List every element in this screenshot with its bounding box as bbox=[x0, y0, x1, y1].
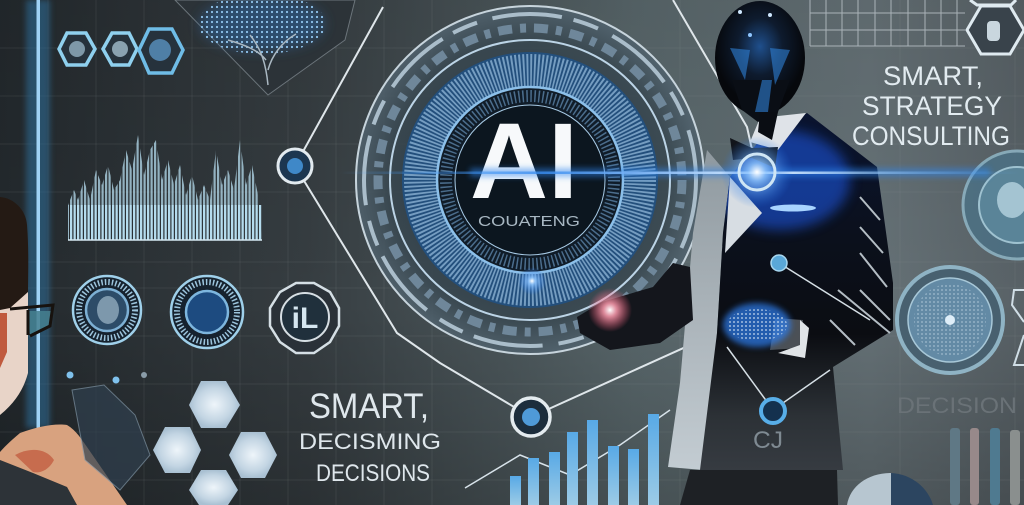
dial subtitle: COUATENG bbox=[478, 213, 580, 230]
sleeve stripes bbox=[830, 197, 890, 345]
dark suit body bbox=[700, 113, 893, 470]
hexagon icon top right bbox=[967, 0, 1024, 54]
network connection lines bbox=[295, 0, 757, 417]
smart decisions text: DECISIONS bbox=[316, 460, 430, 487]
faded decision label: DECISION bbox=[897, 393, 1017, 418]
consultant figure bbox=[577, 1, 893, 505]
brain tree hologram top bbox=[175, 0, 355, 95]
trousers bbox=[680, 470, 838, 505]
area chart left bbox=[68, 135, 262, 240]
badge glyph: iL bbox=[292, 302, 318, 335]
right hand and cuff bbox=[770, 318, 803, 350]
right heading smart strategy consulting: STRATEGY bbox=[862, 91, 1002, 121]
hexagon icons top left bbox=[59, 29, 183, 73]
bow tie bbox=[730, 138, 778, 168]
hexagon molecules bottom left bbox=[66, 372, 277, 505]
gauges bottom right bbox=[847, 428, 1020, 505]
shirt collar bbox=[750, 113, 806, 150]
blue jacket glow bbox=[710, 130, 850, 230]
AI title: AI bbox=[470, 100, 578, 221]
shirt bbox=[725, 177, 762, 253]
central AI dial bbox=[355, 5, 705, 355]
light jacket left side bbox=[668, 150, 730, 470]
person viewer left bbox=[0, 197, 127, 505]
robot head bbox=[715, 1, 805, 115]
right hologram circles bbox=[897, 151, 1024, 373]
suit network lines and nodes bbox=[727, 255, 870, 423]
bar chart bottom center bbox=[465, 410, 670, 505]
right heading smart strategy consulting bbox=[852, 61, 1010, 151]
smart decisions text bbox=[299, 387, 441, 487]
smart decisions text: SMART, bbox=[309, 387, 429, 426]
right heading smart strategy consulting: SMART, bbox=[883, 61, 983, 91]
network nodes bbox=[278, 149, 550, 436]
chest sketch glyph: CJ bbox=[753, 427, 783, 454]
circular badges left bbox=[73, 276, 339, 353]
lens flares bbox=[340, 136, 1020, 332]
smart decisions text: DECISMING bbox=[299, 429, 441, 454]
pocket light bbox=[770, 204, 816, 212]
grid panel top right bbox=[810, 0, 965, 46]
head shine bbox=[730, 48, 790, 112]
energy orb in hand bbox=[723, 303, 791, 347]
vertical blue light bar bbox=[26, 0, 50, 428]
right heading smart strategy consulting: CONSULTING bbox=[852, 121, 1010, 151]
left arm reaching to dial bbox=[577, 263, 693, 350]
